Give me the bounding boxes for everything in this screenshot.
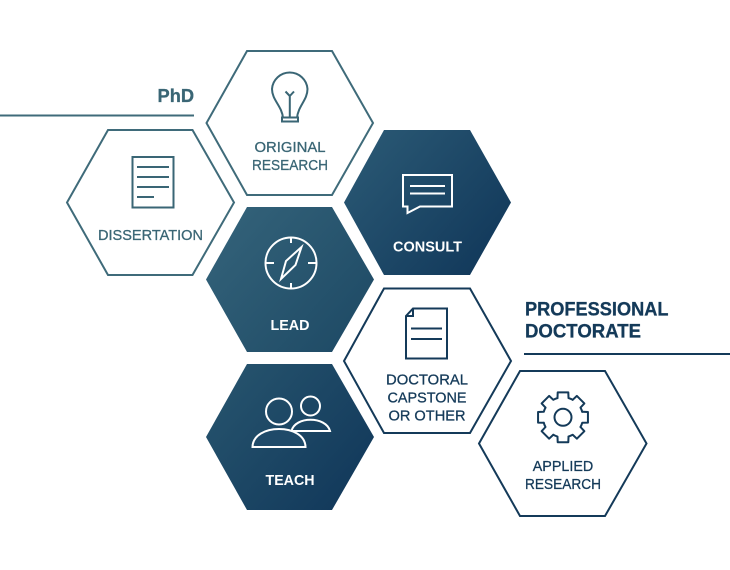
icon: light bulb — [272, 73, 308, 122]
label: teach: TEACH — [266, 472, 314, 489]
Professional Doctorate heading: PROFESSIONAL — [525, 300, 669, 320]
hexagon: consult — [344, 130, 511, 275]
hexagon: doctoral capstone — [344, 288, 511, 433]
icon: people — [252, 396, 330, 447]
hexagon: teach — [206, 364, 374, 510]
hexagon: lead — [206, 207, 374, 352]
hexagon: applied research — [479, 371, 646, 516]
label: original research: ORIGINAL — [254, 139, 326, 156]
label: consult: CONSULT — [393, 238, 462, 256]
PhD heading: PhD — [158, 85, 194, 106]
hexagon: dissertation — [67, 130, 234, 275]
icon: gear — [538, 392, 588, 442]
label: doctoral capstone or other: DOCTORAL — [386, 372, 468, 388]
label: original research: RESEARCH — [252, 157, 328, 174]
icon: page with folded corner — [406, 308, 447, 358]
icon: document — [132, 157, 174, 208]
Professional Doctorate heading: DOCTORATE — [525, 322, 641, 342]
icon: compass — [266, 238, 316, 288]
label: applied research: APPLIED — [533, 458, 593, 475]
Professional Doctorate heading — [524, 300, 730, 355]
label: doctoral capstone or other: OR OTHER — [388, 408, 466, 424]
label: doctoral capstone or other: CAPSTONE — [388, 390, 466, 406]
label: applied research: RESEARCH — [525, 476, 601, 493]
hexagon: original research — [206, 51, 373, 195]
icon: speech bubble — [403, 175, 452, 213]
label: lead: LEAD — [270, 317, 310, 334]
label: dissertation: DISSERTATION — [98, 227, 203, 244]
